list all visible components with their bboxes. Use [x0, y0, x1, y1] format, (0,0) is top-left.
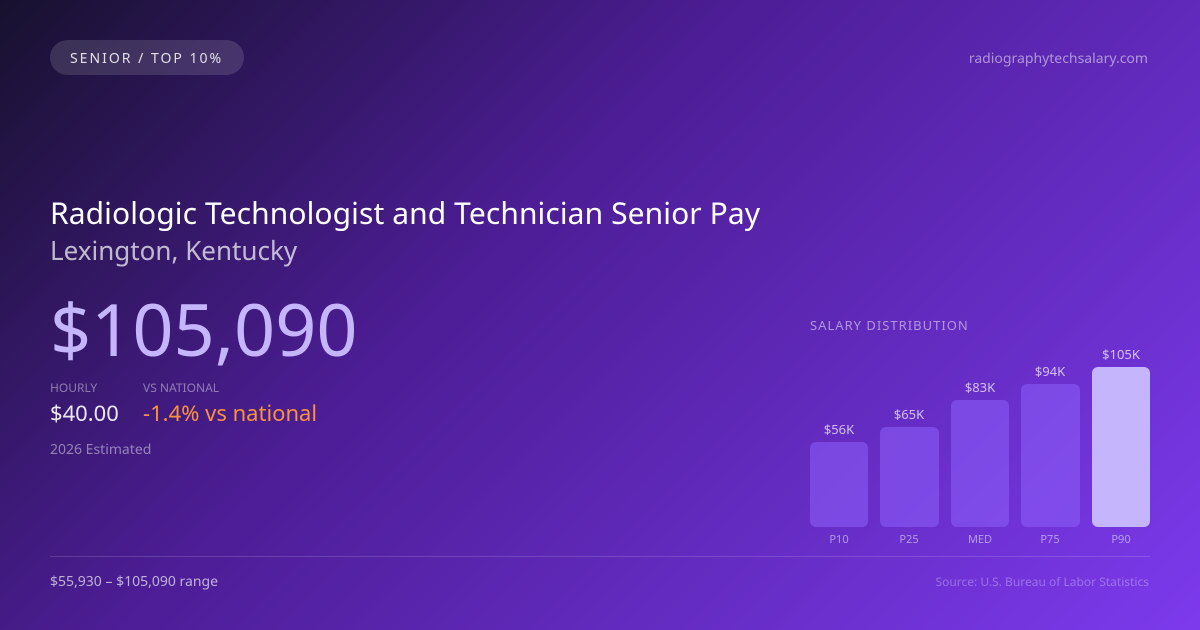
hourly value: $40.00 [50, 398, 119, 428]
bar chart: salary distribution [810, 316, 1150, 547]
salary range: $55,930 – $105,090 range [50, 572, 218, 591]
bar P25 [880, 405, 939, 547]
bar P75 [1021, 362, 1080, 547]
bar median: $83K [965, 378, 995, 396]
badge: senior / top 10% [50, 40, 244, 75]
bar P10: $56K [824, 420, 854, 438]
site domain: radiographytechsalary.com [969, 49, 1148, 68]
vs national value: -1.4% vs national [143, 398, 317, 428]
bar P90 [1092, 345, 1150, 547]
bar P75: $94K [1035, 362, 1065, 380]
bar median: MED [968, 532, 992, 547]
bar P10 [810, 420, 868, 547]
source: Source: U.S. Bureau of Labor Statistics [936, 573, 1149, 590]
main salary figure: $105,090 [50, 280, 358, 378]
bar P90: $105K [1102, 345, 1140, 363]
chart heading: SALARY DISTRIBUTION [810, 316, 969, 334]
stat: hourly [50, 379, 119, 428]
bar P90: P90 [1111, 532, 1131, 547]
bar P25: $65K [894, 405, 924, 423]
data year note: 2026 Estimated [50, 440, 151, 459]
stat: vs national [143, 379, 317, 428]
title: Radiologic Technologist and Technician Senior Pay [50, 192, 760, 233]
bar P25: P25 [899, 532, 919, 547]
hourly label: HOURLY [50, 379, 97, 396]
vs national label: VS NATIONAL [143, 379, 219, 396]
bar median [951, 378, 1009, 547]
subtitle: location: Lexington, Kentucky [50, 232, 297, 268]
bar P10: P10 [829, 532, 849, 547]
badge: senior / top 10%: SENIOR / TOP 10% [70, 49, 223, 68]
bar P75: P75 [1040, 532, 1060, 547]
